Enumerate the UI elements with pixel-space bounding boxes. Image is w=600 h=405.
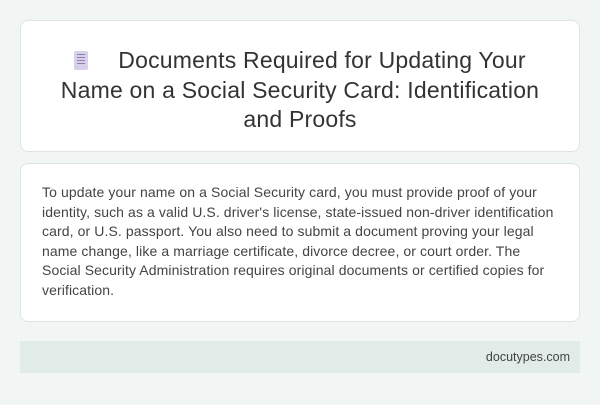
text block: Social Security Administration requires original documents or certified copies for (42, 262, 544, 278)
title: and Proofs (243, 106, 357, 132)
title: Documents Required for Updating Your (118, 47, 526, 73)
text block: To update your name on a Social Security card, you must provide proof of your (42, 184, 537, 200)
text block: verification. (42, 282, 114, 298)
text block: name change, like a marriage certificate, divorce decree, or court order. The (42, 242, 520, 258)
icon: document (74, 51, 88, 70)
title: Name on a Social Security Card: Identification (61, 76, 539, 102)
text block: card, or U.S. passport. You also need to submit a document proving your legal (42, 223, 534, 239)
text block (42, 184, 553, 298)
text block: identity, such as a valid U.S. driver's license, state-issued non-driver identification (42, 204, 553, 220)
footer text: docutypes.com (486, 350, 570, 364)
panel: description text (20, 163, 580, 322)
panel: title card (20, 20, 580, 152)
footer (20, 341, 580, 373)
title (61, 47, 539, 132)
